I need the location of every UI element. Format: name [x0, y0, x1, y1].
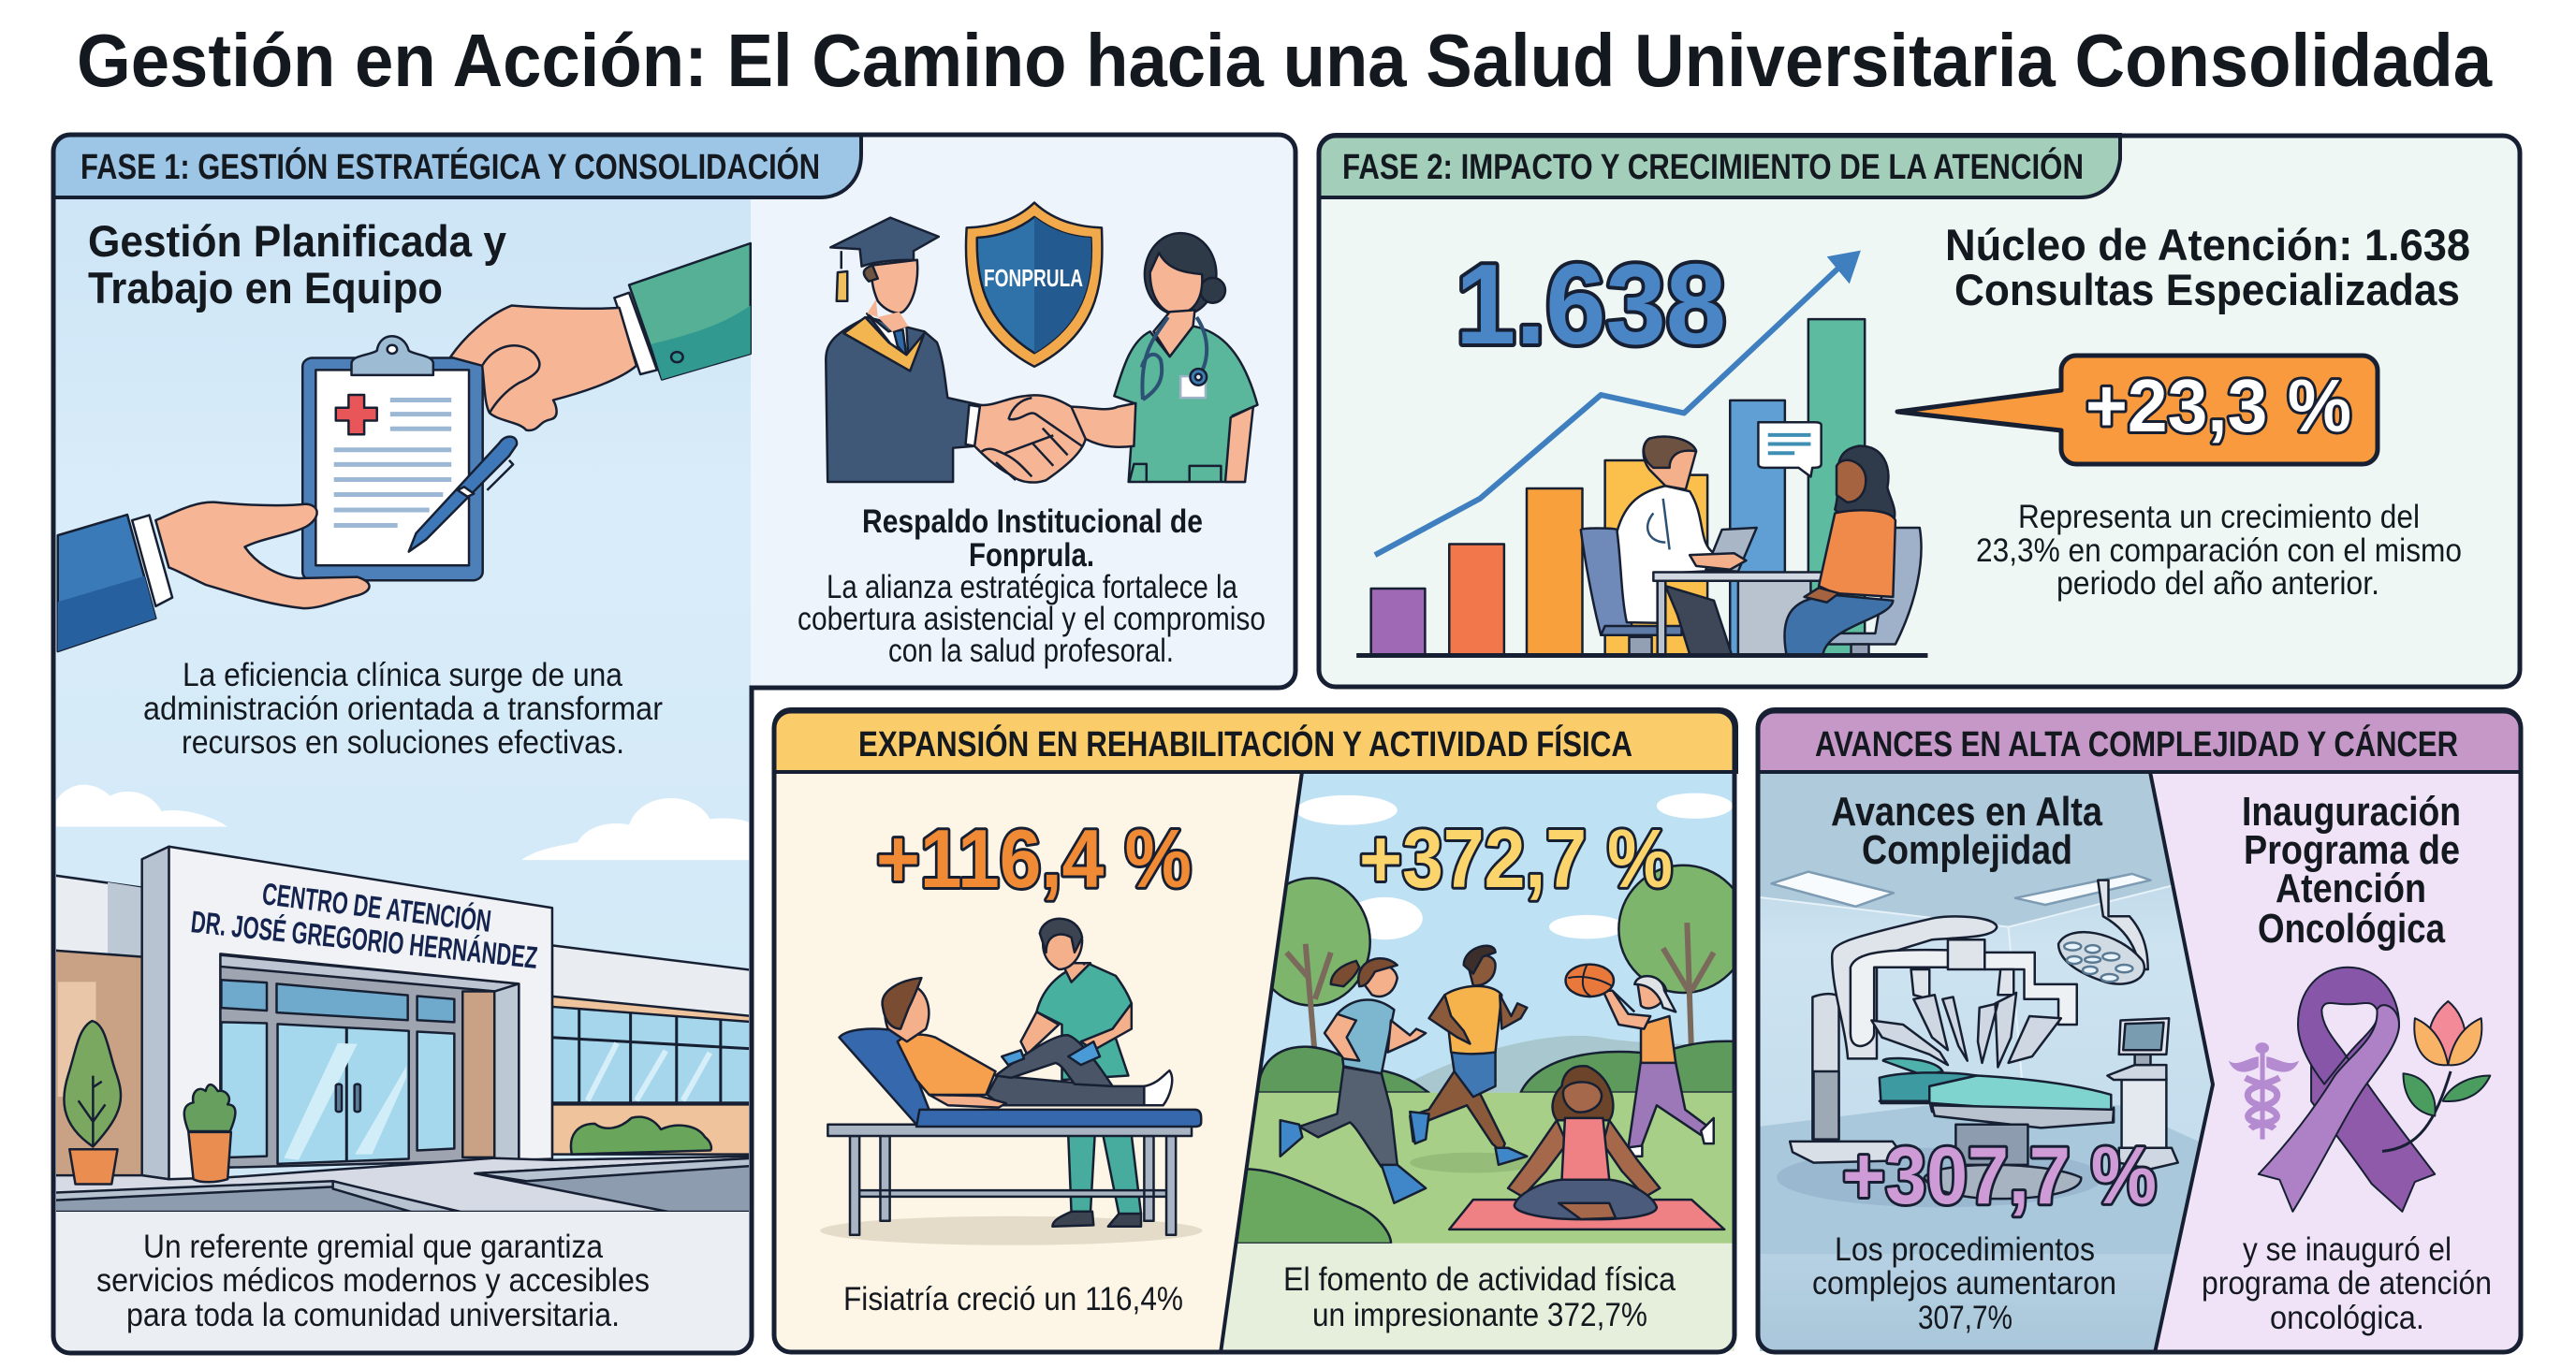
yoga woman — [1508, 1066, 1660, 1219]
illustration: handshake and shield — [826, 203, 1257, 483]
text: referente gremial: servicios médicos modernos y accesibles — [96, 1262, 650, 1299]
man runner — [1410, 946, 1527, 1165]
text: representa un crecimiento: periodo del año anterior. — [2056, 565, 2379, 602]
text: eficiencia clínica: recursos en soluciones efectivas. — [182, 724, 624, 761]
text: eficiencia clínica — [143, 657, 663, 761]
header tab: fase 2: FASE 2: IMPACTO Y CRECIMIENTO DE LA ATENCIÓN — [1342, 146, 2084, 187]
stat: +307,7 %: +307,7 % — [1842, 1131, 2157, 1221]
text: respaldo institucional: La alianza estratégica fortalece la — [827, 569, 1237, 605]
text: procedimientos — [1812, 1231, 2116, 1336]
text: actividad física — [1283, 1261, 1676, 1333]
heading: alta complejidad: Complejidad — [1862, 827, 2072, 873]
text: referente gremial — [96, 1229, 650, 1333]
illustration: ribbon, caduceus and flower — [2229, 968, 2490, 1212]
yoga mat — [1449, 1200, 1724, 1230]
illustration: park activity — [1214, 770, 1748, 1354]
text: representa un crecimiento: Representa un crecimiento del — [2018, 499, 2420, 535]
heading: programa oncológico: Oncológica — [2258, 906, 2445, 952]
woman with ball — [1566, 965, 1714, 1157]
text: fisiatría: Fisiatría creció un 116,4% — [843, 1281, 1183, 1317]
illustration: operating room — [1750, 767, 2228, 1366]
heading: programa oncológico: Programa de — [2244, 827, 2460, 873]
text: FONPRULA on shield: FONPRULA — [984, 264, 1083, 292]
text: respaldo institucional: cobertura asistencial y el compromiso — [798, 601, 1266, 637]
text: inauguró: programa de atención — [2202, 1265, 2492, 1302]
header tab: fase 1: FASE 1: GESTIÓN ESTRATÉGICA Y CONSOLIDACIÓN — [80, 146, 820, 187]
text: referente gremial: para toda la comunidad universitaria. — [126, 1297, 620, 1333]
text: representa un crecimiento — [1976, 499, 2462, 602]
illustration: centro de atención building — [49, 785, 754, 1212]
text: referente gremial: Un referente gremial que garantiza — [143, 1229, 603, 1265]
panel: alta complejidad y cáncer — [1750, 709, 2521, 1366]
callout: +23,3 % — [1897, 356, 2378, 464]
heading: gestión planificada — [88, 216, 506, 313]
text: inauguró: y se inauguró el — [2243, 1231, 2452, 1268]
header: expansión: EXPANSIÓN EN REHABILITACIÓN Y ACTIVIDAD FÍSICA — [858, 723, 1632, 764]
text: eficiencia clínica: administración orientada a transformar — [143, 691, 663, 727]
heading: núcleo de atención: Consultas Especializadas — [1954, 265, 2460, 314]
stat: +372,7 %: +372,7 % — [1359, 812, 1673, 905]
stat: +116,4 %: +116,4 % — [876, 812, 1192, 905]
heading: alta complejidad: Avances en Alta — [1831, 789, 2102, 835]
heading: programa oncológico: Atención — [2276, 866, 2426, 911]
heading: núcleo de atención: Núcleo de Atención: 1.638 — [1945, 220, 2470, 269]
callout: +23,3 %: +23,3 % — [2086, 364, 2351, 447]
woman runner — [1281, 958, 1426, 1203]
panel: fase 2 — [1319, 135, 2520, 687]
text: procedimientos: Los procedimientos — [1835, 1231, 2095, 1268]
header: avances — [1758, 709, 2521, 772]
text: inauguró — [2202, 1231, 2492, 1336]
text: representa un crecimiento: 23,3% en comparación con el mismo — [1976, 532, 2462, 569]
heading: gestión planificada: Trabajo en Equipo — [88, 263, 443, 313]
header tab: fase 1 — [53, 135, 861, 197]
panel: rehabilitación y actividad física — [774, 709, 1748, 1354]
text: respaldo institucional: Fonprula. — [969, 537, 1094, 574]
text: actividad física: El fomento de actividad física — [1283, 1261, 1676, 1298]
heading: alta complejidad — [1831, 789, 2102, 873]
text: inauguró: oncológica. — [2270, 1300, 2424, 1336]
heading: núcleo de atención — [1945, 220, 2470, 314]
trend arrow — [1375, 251, 1861, 555]
heading: gestión planificada: Gestión Planificada y — [88, 216, 506, 266]
text: respaldo institucional: Respaldo Institucional de — [862, 503, 1203, 540]
text: actividad física: un impresionante 372,7% — [1312, 1297, 1647, 1333]
heading: programa oncológico — [2242, 789, 2461, 952]
illustration: hands and clipboard — [58, 243, 751, 651]
building sign: CENTRO DE ATENCIÓN — [260, 876, 493, 939]
text: procedimientos: 307,7% — [1918, 1300, 2012, 1336]
illustration: physiotherapy — [820, 919, 1203, 1245]
building sign: DR. JOSÉ GREGORIO HERNÁNDEZ — [189, 904, 539, 975]
text: respaldo institucional: con la salud profesoral. — [888, 633, 1174, 669]
text: respaldo institucional — [798, 503, 1266, 669]
panel: fase 1 — [49, 135, 1295, 1353]
heading: programa oncológico: Inauguración — [2242, 789, 2461, 835]
header tab: fase 2 — [1319, 135, 2120, 197]
header: expansión — [774, 709, 1736, 772]
text: procedimientos: complejos aumentaron — [1812, 1265, 2116, 1302]
building sign — [189, 876, 539, 975]
text: eficiencia clínica: La eficiencia clínica surge de una — [183, 657, 622, 693]
chart: rising bars and consultation — [1356, 251, 1927, 656]
stat: 1.638: 1.638 — [1456, 240, 1726, 368]
